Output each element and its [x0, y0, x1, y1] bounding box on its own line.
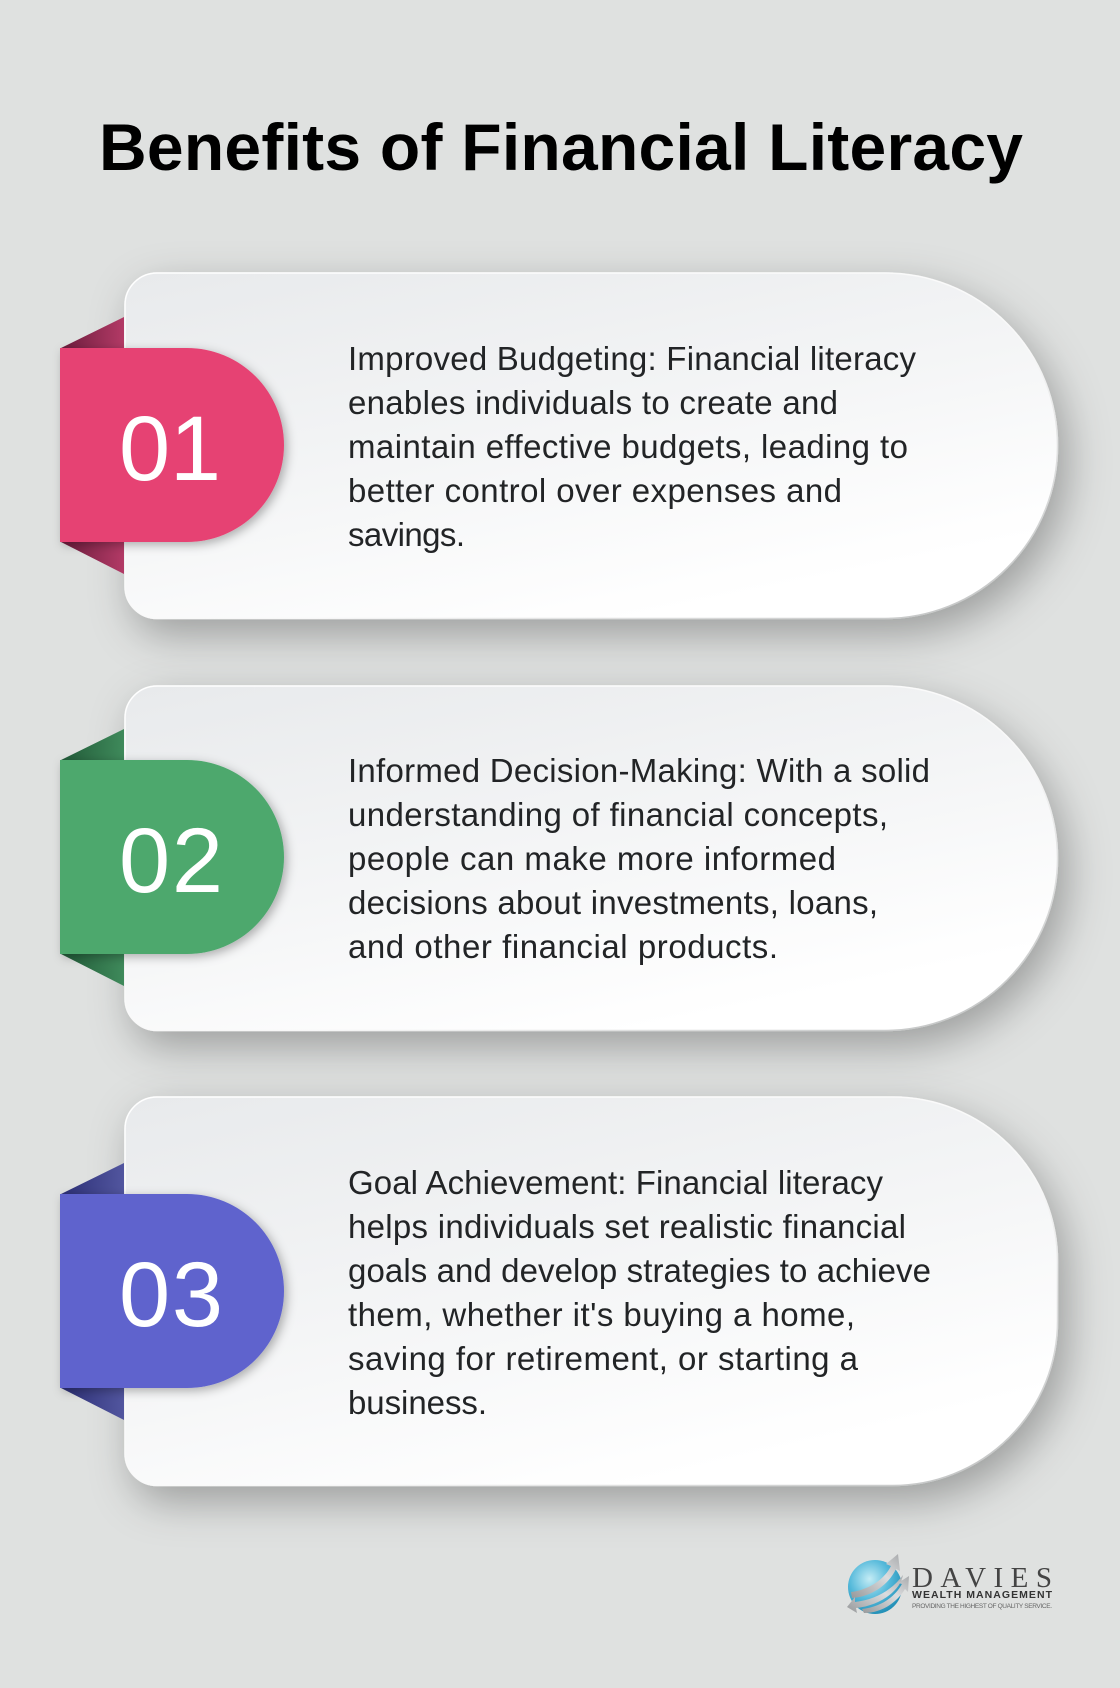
card background 2 — [125, 686, 1058, 1031]
panel: goal achievement — [60, 1097, 1058, 1486]
panel: improved budgeting — [60, 273, 1058, 618]
logo: Davies Wealth Management — [847, 1554, 1053, 1614]
ribbon fold top 2 — [61, 729, 124, 760]
body text 1: savings. — [348, 516, 465, 553]
number badge 2 — [60, 760, 284, 954]
ribbon fold bottom 1 — [61, 542, 124, 574]
panel: informed decision-making — [60, 686, 1058, 1031]
number 02: 02 — [119, 810, 223, 912]
icon: globe with arrows — [847, 1554, 909, 1614]
ribbon fold top 1 — [61, 317, 124, 348]
body text 1: Improved Budgeting: Financial literacy — [348, 340, 916, 377]
number badge 3 — [60, 1194, 284, 1388]
card background 3 — [125, 1097, 1058, 1486]
body text 2: people can make more informed — [348, 840, 836, 877]
body text 2: and other financial products. — [348, 928, 778, 965]
body text 1: better control over expenses and — [348, 472, 842, 509]
title: Benefits of Financial Literacy — [99, 110, 1023, 184]
body text 2 — [348, 752, 930, 965]
number 03: 03 — [119, 1244, 223, 1346]
body text 2: decisions about investments, loans, — [348, 884, 878, 921]
number 01: 01 — [119, 398, 221, 500]
logo wordmark: DAVIES — [912, 1562, 1052, 1594]
body text 2: understanding of financial concepts, — [348, 796, 888, 833]
body text 3: goals and develop strategies to achieve — [348, 1252, 931, 1289]
body text 1: maintain effective budgets, leading to — [348, 428, 908, 465]
number badge 1 — [60, 348, 284, 542]
body text 3: saving for retirement, or starting a — [348, 1340, 859, 1377]
body text 2: Informed Decision-Making: With a solid — [348, 752, 930, 789]
body text 3: Goal Achievement: Financial literacy — [348, 1164, 884, 1201]
ribbon fold bottom 2 — [61, 954, 124, 986]
body text 3: business. — [348, 1384, 487, 1421]
ribbon fold top 3 — [61, 1163, 124, 1194]
body text 1: enables individuals to create and — [348, 384, 838, 421]
body text 3: helps individuals set realistic financial — [348, 1208, 906, 1245]
logo subtitle: WEALTH MANAGEMENT — [912, 1589, 1053, 1601]
body text 1 — [348, 340, 916, 553]
body text 3: them, whether it's buying a home, — [348, 1296, 855, 1333]
card background 1 — [125, 273, 1058, 618]
logo tagline: PROVIDING THE HIGHEST OF QUALITY SERVICE. — [912, 1603, 1052, 1610]
ribbon fold bottom 3 — [61, 1388, 124, 1420]
body text 3 — [348, 1164, 931, 1421]
